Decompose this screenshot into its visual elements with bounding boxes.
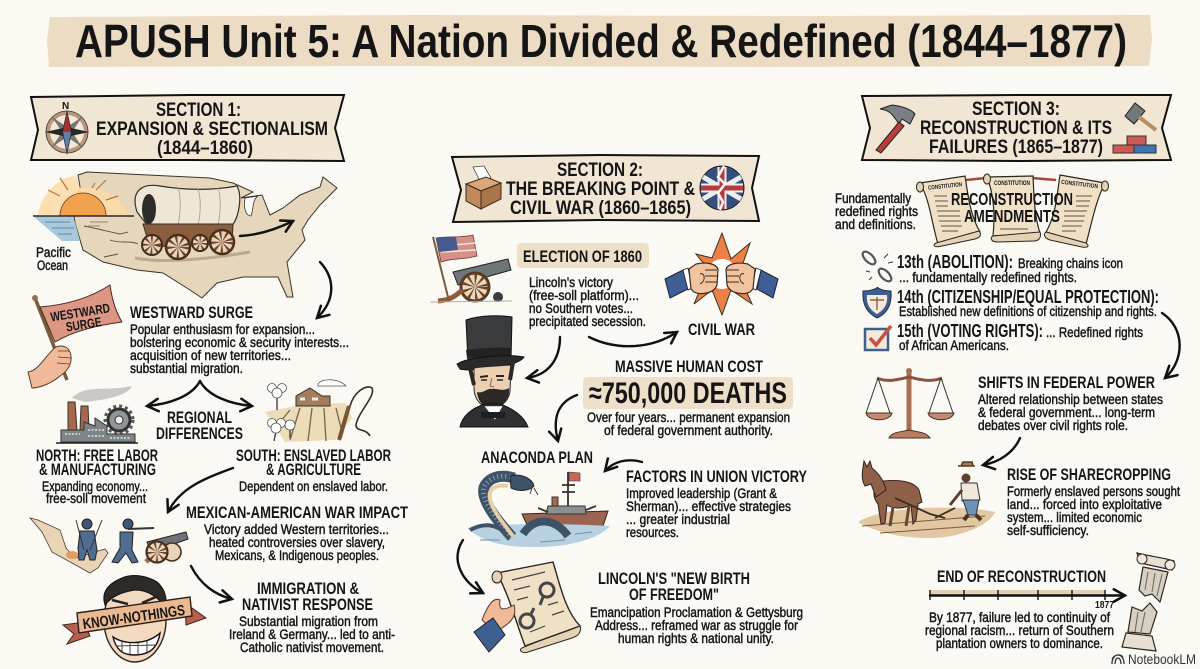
text: south: Dependent on enslaved labor. [239, 479, 388, 494]
icon: breaking chains [861, 250, 893, 283]
section 3 banner: SECTION 3: [972, 98, 1060, 120]
text: Lincoln's new birth of freedom: human rights & national unity. [618, 631, 774, 646]
arrow: federal power to sharecropping [983, 438, 1020, 465]
text: 13th amendment [897, 252, 1123, 285]
icon: covered wagon [135, 185, 240, 259]
text: factors in union victory: Sherman)... effective strategies [626, 499, 791, 514]
icon: clashing fists [665, 233, 778, 315]
text: rise of sharecropping [1007, 466, 1180, 538]
text: Lincoln's new birth of freedom: OF FREEDOM" [629, 586, 719, 604]
panel: section 3 reconstruction and its failures [835, 95, 1180, 651]
text: factors in union victory: resources. [626, 525, 679, 540]
icon: westward surge flag: SURGE [65, 314, 103, 335]
label: election of 1860 [517, 243, 649, 268]
icon: three constitution scrolls: CONSTITUTION [994, 181, 1030, 187]
label: Pacific Ocean [36, 245, 71, 273]
label: regional differences [156, 409, 243, 443]
text: Lincoln's new birth of freedom: Emancipation Proclamation & Gettysburg [590, 605, 803, 620]
label: end of reconstruction: END OF RECONSTRUCTION [937, 568, 1106, 586]
text: 13th amendment: ... fundamentally redefined rights. [899, 270, 1077, 285]
text: human cost body: Over four years... permanent expansion [587, 410, 790, 425]
arrow: election to Lincoln [527, 337, 560, 378]
text: mexican-american war [186, 504, 408, 563]
icon: soldiers with cannon [76, 519, 188, 563]
text: mexican-american war: heated controversies over slavery, [209, 535, 385, 550]
text: shifts in federal power [978, 374, 1163, 433]
icon: compass rose [45, 101, 89, 155]
text: shifts in federal power: & federal government... long-term [978, 405, 1155, 420]
section 2 banner: THE BREAKING POINT & [506, 178, 695, 200]
text: westward surge: Popular enthusiasm for expansion... [130, 322, 315, 337]
text: end of reconstruction body: plantation owners to dominance. [936, 636, 1103, 651]
icon: anaconda and ship [467, 472, 610, 547]
text: fundamentally redefined: redefined rights [835, 204, 918, 219]
text: Lincoln's new birth of freedom [590, 570, 803, 646]
icon: balance scales [866, 368, 954, 438]
label: civil war: CIVIL WAR [688, 321, 755, 339]
icon: shield with scales [863, 287, 891, 318]
panel: section 1 expansion and sectionalism [28, 95, 408, 662]
arrow: war to immigration [191, 566, 232, 599]
arrow: map to westward surge [317, 262, 331, 318]
arrow: factors to anaconda plan [605, 460, 642, 471]
text: end of reconstruction body: regional racism... return of Southern [925, 623, 1114, 638]
text: Lincoln's new birth of freedom: Address... reframed war as struggle for [595, 618, 798, 633]
icon: Abraham Lincoln portrait [457, 316, 528, 427]
panel: section 2 the breaking point and civil war [430, 155, 807, 653]
text: westward surge: acquisition of new territories... [130, 348, 291, 363]
icon: westward surge flag [28, 285, 122, 388]
chart: timeline to 1877 [930, 590, 1125, 611]
icon: voting checkbox [865, 326, 891, 350]
text: immigration and nativist response: Catholic nativist movement. [240, 640, 384, 655]
text: south [236, 447, 391, 494]
section 2 banner: SECTION 2: [557, 159, 643, 181]
section 3 banner: RECONSTRUCTION & ITS [920, 117, 1112, 139]
icon: factory [56, 386, 138, 443]
section 3 banner [862, 95, 1171, 161]
icon: westward surge flag: WESTWARD [49, 300, 111, 325]
text: 15th amendment: ... Redefined rights [1046, 325, 1143, 340]
section 3 banner: FAILURES (1865–1877) [929, 136, 1103, 158]
text: westward surge: bolstering economic & security interests... [130, 335, 349, 350]
chart: timeline to 1877: 1877 [1095, 599, 1114, 611]
text: human cost body [587, 410, 790, 438]
label: anaconda plan: ANACONDA PLAN [481, 449, 593, 467]
icon: map of Mexico [30, 518, 108, 573]
text: immigration and nativist response [229, 580, 395, 655]
section 1 banner: (1844–1860) [157, 137, 253, 159]
banner: know-nothings: KNOW-NOTHINGS [82, 602, 186, 633]
section 2 banner [452, 155, 759, 222]
text: shifts in federal power: debates over civil rights role. [978, 418, 1128, 433]
text: westward surge: WESTWARD SURGE [130, 304, 253, 322]
text: fundamentally redefined: Fundamentally [835, 191, 911, 206]
callout: about 750,000 deaths: ≈750,000 DEATHS [589, 377, 787, 410]
text: 15th amendment: of African Americans. [899, 338, 1009, 353]
text: south: & AGRICULTURE [266, 461, 361, 479]
icon: broken column [1122, 553, 1175, 651]
text: mexican-american war: Mexicans, & Indigenous peoples. [215, 548, 379, 563]
label: reconstruction amendments: AMENDMENTS [964, 206, 1060, 226]
text: mexican-american war: Victory added Western territories... [204, 522, 389, 537]
arrow: across the map [240, 221, 293, 236]
text: westward surge: substantial migration. [130, 361, 243, 376]
text: mexican-american war: MEXICAN-AMERICAN WAR IMPACT [186, 504, 408, 522]
label: Pacific Ocean: Ocean [37, 258, 68, 273]
icon: compass rose: N [62, 101, 69, 112]
text: north: Expanding economy... [42, 479, 148, 494]
text: north: free-soll movement [46, 491, 146, 506]
label: reconstruction amendments: RECONSTRUCTION [951, 189, 1073, 209]
text: massive human cost heading: MASSIVE HUMAN COST [615, 358, 763, 376]
icon: cracked union flag [700, 166, 744, 210]
text: factors in union victory: ... greater industrial [626, 512, 730, 527]
section 1 banner [31, 95, 344, 161]
text: election body: no Southern votes... [529, 301, 633, 316]
arrow: election to civil war [589, 332, 677, 346]
label: regional differences: DIFFERENCES [156, 425, 243, 443]
text: election body [529, 275, 646, 329]
text: rise of sharecropping: self-sufficiency. [1007, 523, 1089, 538]
text: north: & MANUFACTURING [39, 461, 156, 479]
text: end of reconstruction body [925, 610, 1114, 651]
label: Pacific Ocean: Pacific [36, 245, 71, 260]
arrow: south to war [168, 468, 233, 512]
text: human cost body: of federal government authority. [604, 423, 773, 438]
icon: sunset over ocean [33, 176, 134, 241]
text: immigration and nativist response: NATIVIST RESPONSE [242, 596, 373, 614]
section 1 banner: EXPANSION & SECTIONALISM [96, 118, 328, 140]
arrows: regional split [147, 381, 252, 406]
icon: mallet and bricks [1113, 103, 1156, 153]
label: reconstruction amendments [951, 189, 1073, 226]
text: 13th amendment: Breaking chains icon [1018, 256, 1123, 271]
icon: hammer [876, 105, 915, 153]
text: 14th amendment [897, 287, 1159, 319]
text: immigration and nativist response: IMMIGRATION & [257, 580, 359, 598]
label: election of 1860: ELECTION OF 1860 [523, 248, 642, 266]
icon: three constitution scrolls: CONSTITUTION [928, 182, 962, 192]
text: election body: Lincoln's victory [529, 275, 613, 290]
icon: emancipation scroll with broken shackles [474, 562, 581, 653]
text: rise of sharecropping: land... forced into exploitative [1007, 497, 1162, 512]
text: end of reconstruction body: By 1877, failure led to continuity of [929, 610, 1110, 625]
arrow: deaths to anaconda plan [556, 395, 577, 441]
text: factors in union victory: Improved leadership (Grant & [626, 486, 777, 501]
text: 13th amendment: 13th (ABOLITION): [897, 252, 1013, 272]
arrow: amendments to federal power [1162, 313, 1180, 378]
icon: three constitution scrolls [916, 174, 1108, 247]
text: north [36, 447, 158, 506]
text: north: NORTH: FREE LABOR [36, 447, 158, 465]
icon: know-nothings head [63, 576, 206, 662]
text: factors in union victory [626, 468, 807, 540]
text: south: SOUTH: ENSLAVED LABOR [236, 447, 391, 465]
icon: farmer plowing with mule [858, 461, 995, 538]
icon: flag and cannon [430, 235, 512, 302]
text: election body: precipitated secession. [529, 314, 646, 329]
label: regional differences: REGIONAL [167, 409, 232, 427]
text: 15th amendment [897, 321, 1143, 353]
text: fundamentally redefined: and definitions. [835, 217, 916, 232]
icon: plantation and whip [265, 380, 373, 442]
icon: three constitution scrolls: CONSTITUTION [1061, 180, 1098, 190]
text: immigration and nativist response: Ireland & Germany... led to anti- [229, 627, 395, 642]
text: 15th amendment: 15th (VOTING RIGHTS): [897, 321, 1043, 341]
icon: ballot box [466, 166, 501, 209]
text: factors in union victory: FACTORS IN UNION VICTORY [626, 468, 807, 486]
section 1 banner: SECTION 1: [156, 99, 241, 121]
arrow: anaconda to new birth [458, 540, 483, 593]
text: fundamentally redefined [835, 191, 918, 232]
text: shifts in federal power: Altered relationship between states [978, 392, 1163, 407]
text: Lincoln's new birth of freedom: LINCOLN'S "NEW BIRTH [598, 570, 750, 588]
text: rise of sharecropping: system... limited economic [1007, 510, 1142, 525]
text: immigration and nativist response: Substantial migration from [239, 614, 378, 629]
text: westward surge [130, 304, 349, 376]
text: election body: (free-soll platform)... [529, 288, 639, 303]
map of the United States [73, 172, 337, 298]
section 2 banner: CIVIL WAR (1860–1865) [510, 197, 691, 219]
